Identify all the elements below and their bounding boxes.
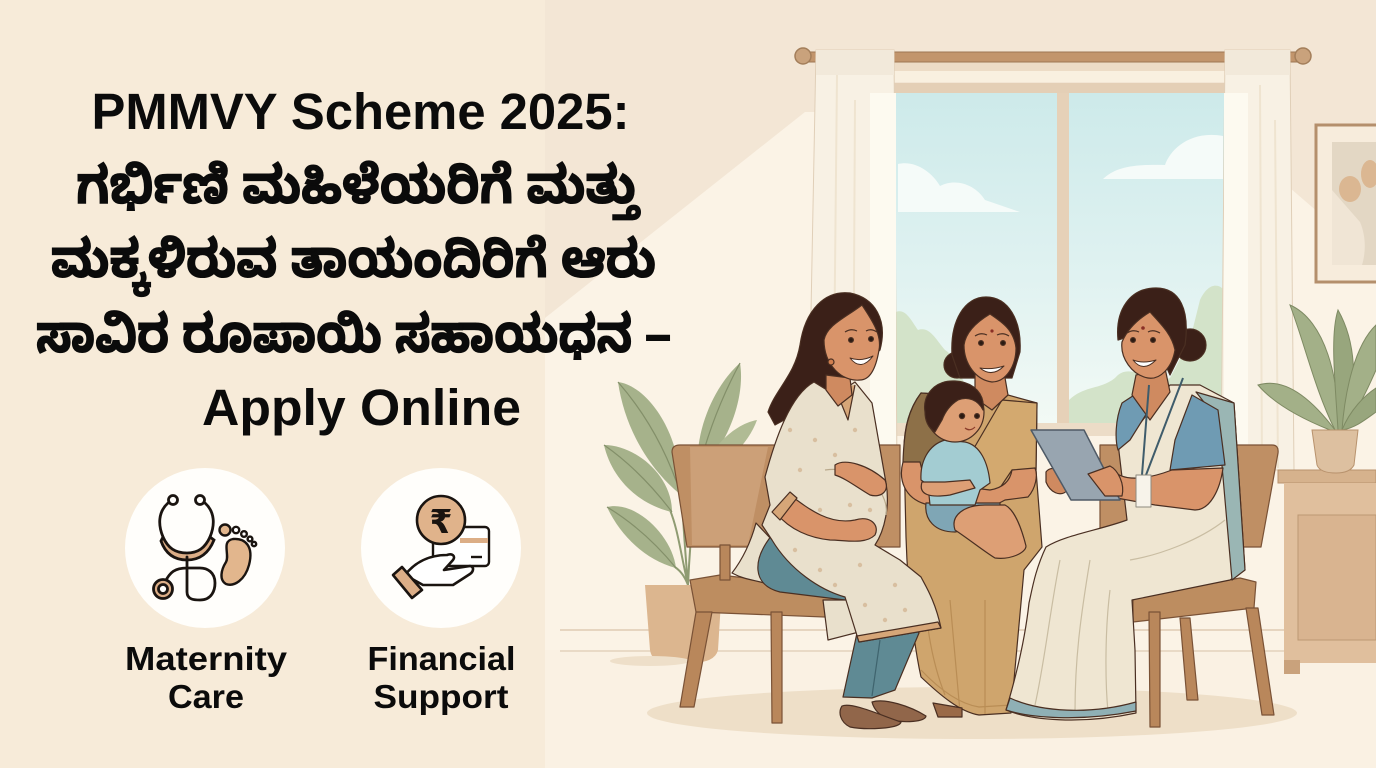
title: ಮಕ್ಕಳಿರುವ ತಾಯಂದಿರಿಗೆ ಆರು bbox=[51, 231, 656, 297]
label: maternity care: Care bbox=[168, 678, 244, 715]
kurta hem trim bbox=[857, 622, 941, 642]
icon: rupee coin: ₹ bbox=[430, 502, 452, 541]
shoes bbox=[872, 701, 926, 722]
title: ಗರ್ಭಿಣಿ ಮಹಿಳೆಯರಿಗೆ ಮತ್ತು bbox=[76, 157, 641, 220]
chair: right bbox=[1100, 445, 1278, 727]
head and neck bbox=[826, 375, 852, 406]
neck bbox=[975, 372, 1008, 410]
hand over tablet bbox=[1088, 466, 1123, 496]
head bbox=[964, 314, 1016, 382]
curtain rod bbox=[795, 48, 1311, 64]
pallu bbox=[1196, 392, 1245, 580]
child bbox=[921, 381, 1026, 558]
title: PMMVY Scheme 2025: bbox=[92, 83, 630, 140]
hair back and bun bbox=[944, 352, 970, 378]
saree folds bbox=[1035, 520, 1225, 712]
arm and hands bbox=[1088, 468, 1223, 510]
right potted plant bbox=[1258, 305, 1376, 473]
label: maternity care bbox=[125, 640, 288, 715]
pregnant woman bbox=[732, 293, 941, 729]
trousers bbox=[758, 535, 919, 698]
left curtain bbox=[808, 50, 897, 470]
chair: left bbox=[672, 445, 900, 723]
icon: hand bbox=[393, 554, 473, 598]
flap under thigh bbox=[823, 600, 859, 640]
cabinet bbox=[1278, 470, 1376, 674]
distant trees bbox=[896, 311, 972, 428]
arm and hands bbox=[776, 495, 876, 541]
saree bbox=[1006, 385, 1245, 720]
right cloud bbox=[1103, 135, 1223, 179]
icon: baby foot bbox=[220, 524, 256, 585]
tablet bbox=[1031, 430, 1120, 500]
pattern dots bbox=[788, 428, 907, 622]
icon: stethoscope bbox=[154, 496, 215, 600]
framed picture bbox=[1316, 125, 1376, 282]
label: financial support: Support bbox=[374, 678, 508, 715]
floor shadow bbox=[647, 687, 1297, 739]
title: Apply Online bbox=[202, 379, 521, 436]
left potted plant bbox=[604, 363, 757, 666]
bun and hair bbox=[1174, 329, 1206, 361]
label: maternity care: Maternity bbox=[125, 640, 288, 677]
health worker bbox=[1006, 288, 1245, 720]
saree teal border bbox=[1006, 698, 1136, 718]
head bbox=[1122, 312, 1175, 378]
left cloud bbox=[898, 163, 1020, 212]
neck bbox=[1132, 368, 1170, 420]
title bbox=[36, 83, 671, 436]
kurta bbox=[762, 382, 941, 642]
long hair bbox=[768, 293, 882, 425]
blouse bbox=[1116, 388, 1160, 450]
icon: credit card bbox=[433, 527, 489, 566]
saree bbox=[904, 390, 1042, 715]
icon circle: financial support bbox=[361, 468, 521, 628]
belly line bbox=[825, 469, 886, 515]
window bbox=[880, 62, 1240, 436]
icon circle: maternity care bbox=[125, 468, 285, 628]
label: financial support: Financial bbox=[368, 640, 516, 677]
sandal bbox=[933, 703, 962, 717]
lanyard and id card bbox=[1142, 378, 1183, 475]
right curtain bbox=[1221, 50, 1294, 470]
label: financial support bbox=[368, 640, 516, 715]
blouse bbox=[903, 393, 950, 470]
title: ಸಾವಿರ ರೂಪಾಯಿ ಸಹಾಯಧನ – bbox=[36, 306, 671, 364]
arms bbox=[901, 462, 1036, 508]
woman with child bbox=[901, 297, 1042, 717]
icon: rupee coin bbox=[417, 496, 465, 544]
back flap of kurta bbox=[732, 523, 772, 584]
